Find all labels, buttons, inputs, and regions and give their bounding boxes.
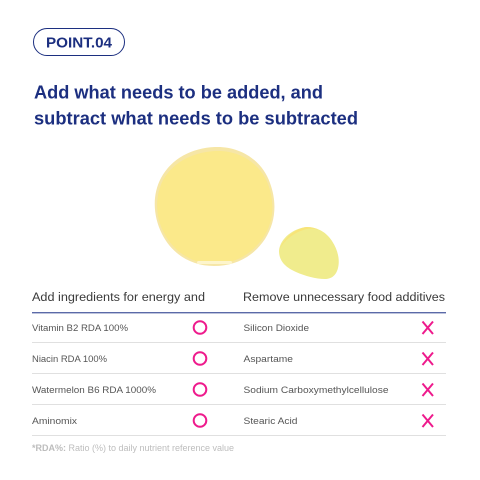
icon: cross: [422, 352, 433, 365]
title: Add what needs to be added, and: [34, 82, 323, 102]
row 4: [32, 414, 433, 427]
row 3: [32, 383, 433, 396]
large drop: [155, 147, 274, 266]
icon: cross: [422, 414, 433, 427]
footnote: *RDA%: Ratio (%) to daily nutrient reference value: [32, 442, 234, 453]
row 1: Vitamin B2 RDA 100%: [32, 323, 128, 334]
row 3: Watermelon B6 RDA 1000%: [32, 385, 156, 396]
small drop: [279, 227, 339, 279]
row 2: Aspartame: [244, 354, 293, 365]
title: [34, 82, 358, 128]
row 1: [32, 321, 433, 334]
row 2: Niacin RDA 100%: [32, 354, 107, 365]
badge: POINT.04: POINT.04: [46, 36, 112, 52]
icon: cross: [422, 322, 433, 334]
badge: POINT.04: [34, 28, 124, 56]
row 4: Stearic Acid: [244, 416, 298, 427]
column heading: add: Add ingredients for energy and: [32, 290, 205, 304]
column heading: remove: Remove unnecessary food additives: [243, 290, 445, 304]
icon: circle: [194, 321, 206, 334]
row 2: [32, 352, 433, 365]
image: yellow oil drops: [155, 147, 339, 279]
row 4: Aminomix: [32, 416, 77, 427]
row 1: Silicon Dioxide: [244, 323, 309, 334]
icon: circle: [194, 352, 206, 365]
title: subtract what needs to be subtracted: [34, 108, 358, 128]
icon: cross: [422, 384, 433, 396]
row 3: Sodium Carboxymethylcellulose: [244, 385, 388, 396]
table header rule: [32, 312, 446, 313]
icon: circle: [194, 414, 206, 427]
icon: circle: [194, 383, 206, 396]
